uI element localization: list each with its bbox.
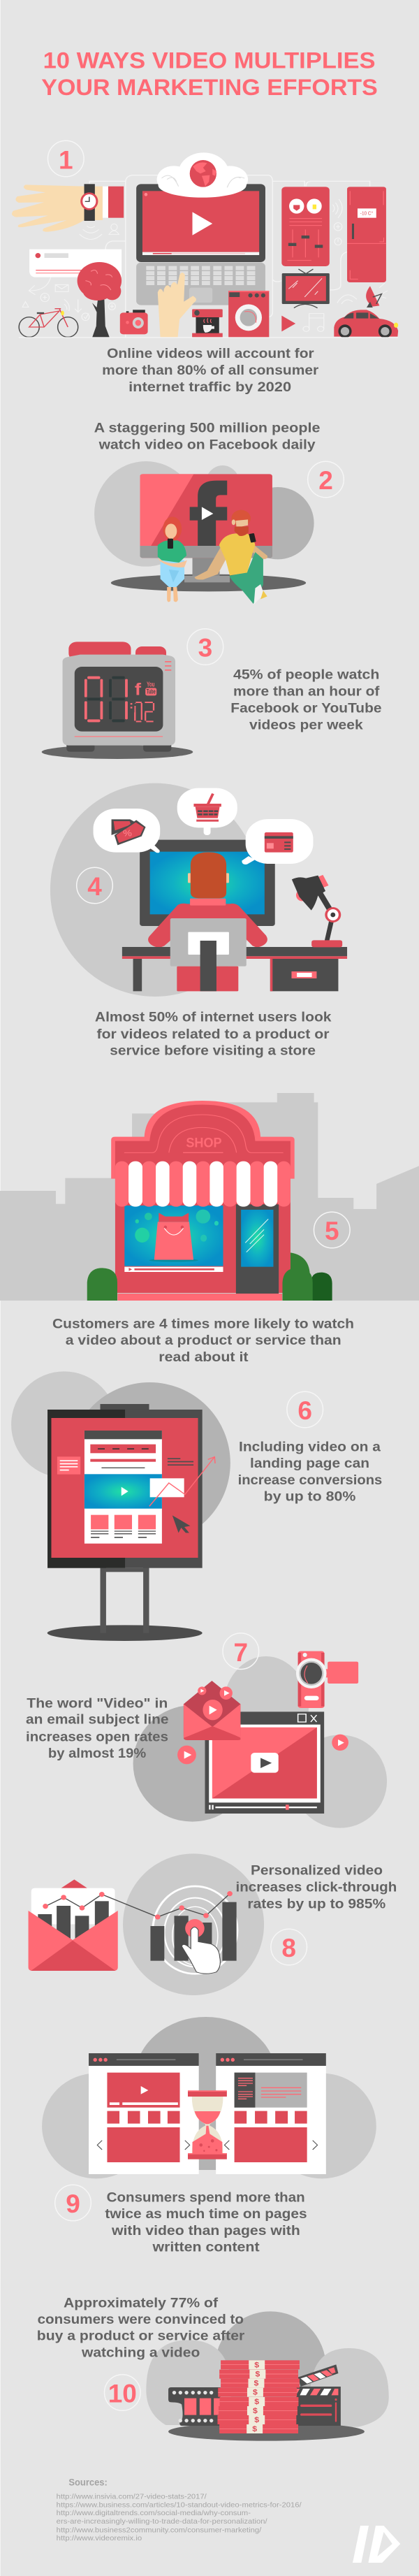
sources: https://www.business.com/articles/10-standout-video-metrics-for-2016/ xyxy=(57,2501,302,2510)
small line icons xyxy=(22,199,388,331)
text: 50 percent: service before visiting a store xyxy=(110,1043,316,1058)
stack of money: $ xyxy=(253,2389,258,2396)
text: landing page: landing page can xyxy=(250,1456,369,1471)
sources: http://www.digitaltrends.com/social-media/why-consum- xyxy=(57,2509,251,2517)
badge 7: 7 xyxy=(234,1638,248,1667)
illustration 3: digital clock xyxy=(42,642,193,759)
trend line xyxy=(43,1891,233,1920)
text: landing page xyxy=(238,1440,382,1504)
hand with watch xyxy=(12,184,124,232)
title: 10 WAYS VIDEO MULTIPLIES xyxy=(43,48,376,73)
background blob xyxy=(123,1853,264,1995)
bar chart xyxy=(150,1902,237,1961)
television xyxy=(282,269,330,308)
stack of money: $ xyxy=(254,2398,260,2406)
open envelope xyxy=(29,1879,118,1971)
text: facebook daily xyxy=(94,421,321,453)
page mockup xyxy=(84,1431,162,1544)
board stand xyxy=(47,1568,203,1641)
stack of money: $ xyxy=(253,2408,258,2415)
digital digits xyxy=(84,676,154,722)
text: twice as much time: with video than pages with xyxy=(111,2223,300,2238)
social logos xyxy=(135,681,156,699)
shop sign: SHOP xyxy=(186,1136,222,1150)
clock body xyxy=(63,655,175,746)
text: 45 percent xyxy=(230,667,382,732)
bicycle xyxy=(19,309,78,337)
floor shadow xyxy=(111,574,306,591)
background blobs xyxy=(146,2311,389,2427)
city skyline xyxy=(0,1093,419,1301)
board frame xyxy=(47,1404,203,1568)
text: 45 percent: more than an hour of xyxy=(233,684,380,700)
man with phone xyxy=(195,510,267,605)
badge 1: 1 xyxy=(59,145,73,175)
desk lamp xyxy=(292,875,342,947)
illustration 8: email analytics and click target xyxy=(29,1853,264,1995)
text: landing page: increase conversions xyxy=(238,1472,382,1488)
coffee machine xyxy=(192,309,223,338)
air conditioner xyxy=(29,249,122,277)
left browser window with video xyxy=(89,2053,199,2174)
illustration 4: person at a desk watching video xyxy=(50,783,347,997)
clock feet and bells xyxy=(66,642,171,752)
tree xyxy=(78,262,122,338)
text: personalized video: increases click-through xyxy=(236,1880,397,1895)
illustration 10: film, money stack and clapperboard xyxy=(146,2311,389,2441)
shop door xyxy=(236,1204,279,1294)
text: 77 percent: watching a video xyxy=(81,2345,200,2361)
illustration 1: connected devices around a laptop xyxy=(12,152,398,338)
stack of money: $ xyxy=(254,2417,260,2424)
text: 4 times: read about it xyxy=(159,1349,249,1365)
badge 10: 10 xyxy=(108,2379,137,2408)
desk xyxy=(122,947,347,991)
stack of money: $ xyxy=(254,2361,260,2369)
legs and chair xyxy=(170,918,247,991)
illustration 5: shop with city skyline xyxy=(0,1093,419,1301)
monitor xyxy=(140,840,275,926)
text: 77 percent xyxy=(37,2295,245,2361)
shop sign xyxy=(111,1101,295,1293)
satellite dish xyxy=(366,286,381,307)
right browser window with text xyxy=(216,2053,326,2174)
woman with phone xyxy=(158,516,187,602)
text: email subject line: an email subject line xyxy=(26,1712,169,1728)
text: personalized video: Personalized video xyxy=(251,1863,383,1879)
text: 45 percent: videos per week xyxy=(249,717,363,732)
illustration 6: landing page board xyxy=(11,1371,230,1641)
speech bubble: price tags: % xyxy=(123,829,132,838)
background blob xyxy=(50,783,260,997)
smart fridge xyxy=(347,187,386,282)
shop step xyxy=(117,1294,282,1301)
text: 77 percent: Approximately 77% of xyxy=(64,2295,219,2310)
badge 3 xyxy=(187,629,223,665)
speech bubble: basket xyxy=(177,788,237,835)
text: 4 times: Customers are 4 times more likely to watch xyxy=(52,1317,354,1332)
clicking hand xyxy=(182,1919,220,1974)
speech bubble: credit card xyxy=(242,819,313,864)
chart with rising arrow xyxy=(149,1457,215,1506)
text: 77 percent: consumers were convinced to xyxy=(38,2312,244,2327)
shadow xyxy=(42,745,193,759)
badge 8 xyxy=(271,1929,307,1965)
text: email subject line: The word "Video" in xyxy=(27,1695,168,1711)
concentric target rings xyxy=(153,1886,237,1974)
background blobs xyxy=(11,1371,230,1544)
background blobs xyxy=(94,461,314,567)
stack of money xyxy=(217,2360,300,2433)
text: personalized video: rates by up to 985% xyxy=(247,1897,385,1912)
badge 9: 9 xyxy=(66,2190,80,2218)
social logos: f xyxy=(135,681,141,699)
badge 6: 6 xyxy=(297,1396,312,1425)
sources: http://www.insivia.com/27-video-stats-2017/ xyxy=(57,2493,207,2501)
tablet with sliders xyxy=(281,187,330,266)
badge 4 xyxy=(77,867,112,904)
badge 5 xyxy=(314,1212,350,1248)
text: landing page: by up to 80% xyxy=(264,1489,355,1504)
text: 50 percent: Almost 50% of internet users look xyxy=(95,1010,332,1025)
washing machine xyxy=(228,291,269,338)
text: facebook daily: watch video on Facebook daily xyxy=(98,437,316,453)
text: online videos xyxy=(102,346,319,395)
text: 50 percent xyxy=(95,1010,332,1058)
text: twice as much time: Consumers spend more than xyxy=(107,2190,305,2206)
text: twice as much time: written content xyxy=(152,2240,260,2255)
striped awning xyxy=(115,1162,291,1207)
camcorder xyxy=(296,1651,358,1708)
stack of money: $ xyxy=(255,2371,260,2378)
badge 3: 3 xyxy=(198,633,212,663)
shop window with shopping bag xyxy=(124,1206,223,1272)
text: 4 times: a video about a product or service than xyxy=(66,1333,341,1348)
badge 1 xyxy=(47,140,84,177)
speech bubble: price tags xyxy=(94,809,160,853)
side text panels xyxy=(57,1456,193,1475)
person seen from behind xyxy=(148,852,267,947)
illustration 2: couple in front of a Facebook video screen xyxy=(94,461,314,605)
badge 4: 4 xyxy=(87,872,102,901)
text: landing page: Including video on a xyxy=(239,1440,381,1455)
badge 9 xyxy=(55,2185,91,2221)
title: YOUR MARKETING EFFORTS xyxy=(41,75,378,100)
text: online videos: more than 80% of all consumer xyxy=(102,363,319,378)
text: 45 percent: 45% of people watch xyxy=(233,667,379,683)
illustration 9: two web pages with hourglass xyxy=(42,2017,376,2178)
video player xyxy=(205,1712,324,1814)
connecting wires xyxy=(89,175,370,338)
text: twice as much time xyxy=(105,2190,307,2255)
text: twice as much time: twice as much time on pages xyxy=(105,2206,307,2222)
badge 6 xyxy=(287,1391,323,1428)
badge 10 xyxy=(105,2375,140,2410)
text: facebook daily: A staggering 500 million people xyxy=(94,421,321,436)
sources: http://www.business2community.com/consumer-marketing/ xyxy=(57,2526,261,2534)
laptop xyxy=(136,184,265,305)
social logos: You xyxy=(147,681,155,688)
text: 45 percent: Facebook or YouTube xyxy=(230,700,382,716)
sources: Sources: xyxy=(68,2477,108,2488)
cursor xyxy=(172,1515,190,1533)
title xyxy=(41,48,378,100)
car xyxy=(334,310,398,338)
text: 4 times xyxy=(52,1317,354,1365)
badge 7 xyxy=(223,1633,259,1669)
bushes xyxy=(87,1252,332,1301)
background blobs xyxy=(133,1656,387,1828)
background blobs xyxy=(42,2017,376,2178)
envelope with play buttons xyxy=(184,1681,240,1740)
play triangle xyxy=(281,316,295,331)
stack of money: $ xyxy=(252,2426,258,2433)
text: email subject line: by almost 19% xyxy=(48,1746,146,1761)
cloud with globe xyxy=(157,152,248,198)
badge 8: 8 xyxy=(281,1934,296,1962)
illustration 7: email with video player xyxy=(133,1651,387,1828)
text: 50 percent: for videos related to a product or xyxy=(96,1027,330,1042)
film strip xyxy=(168,2387,221,2426)
stack of money: $ xyxy=(254,2380,259,2387)
text: 77 percent: buy a product or service after xyxy=(37,2329,245,2344)
floor shadow xyxy=(168,2422,365,2441)
sources xyxy=(57,2477,302,2542)
text: online videos: internet traffic by 2020 xyxy=(128,379,291,395)
smart fridge: -10 C° xyxy=(360,210,373,216)
badge 2 xyxy=(308,461,344,498)
clapperboard xyxy=(296,2364,341,2426)
badge 5: 5 xyxy=(325,1217,339,1245)
monitor xyxy=(140,474,272,582)
logo xyxy=(353,2526,400,2563)
camera xyxy=(120,310,148,334)
sources: http://www.videoremix.io xyxy=(57,2534,142,2542)
text: personalized video xyxy=(236,1863,397,1912)
small play buttons xyxy=(177,1735,348,1764)
text: online videos: Online videos will account for xyxy=(107,346,314,361)
social logos: Tube xyxy=(147,688,156,695)
sources: ers-are-increasingly-willing-to-trade-data-for-personalization/ xyxy=(57,2517,267,2526)
hourglass xyxy=(188,2090,227,2159)
text: email subject line xyxy=(26,1695,169,1761)
badge 2: 2 xyxy=(318,466,333,495)
text: email subject line: increases open rates xyxy=(26,1730,168,1745)
central hand on keyboard xyxy=(158,273,196,338)
